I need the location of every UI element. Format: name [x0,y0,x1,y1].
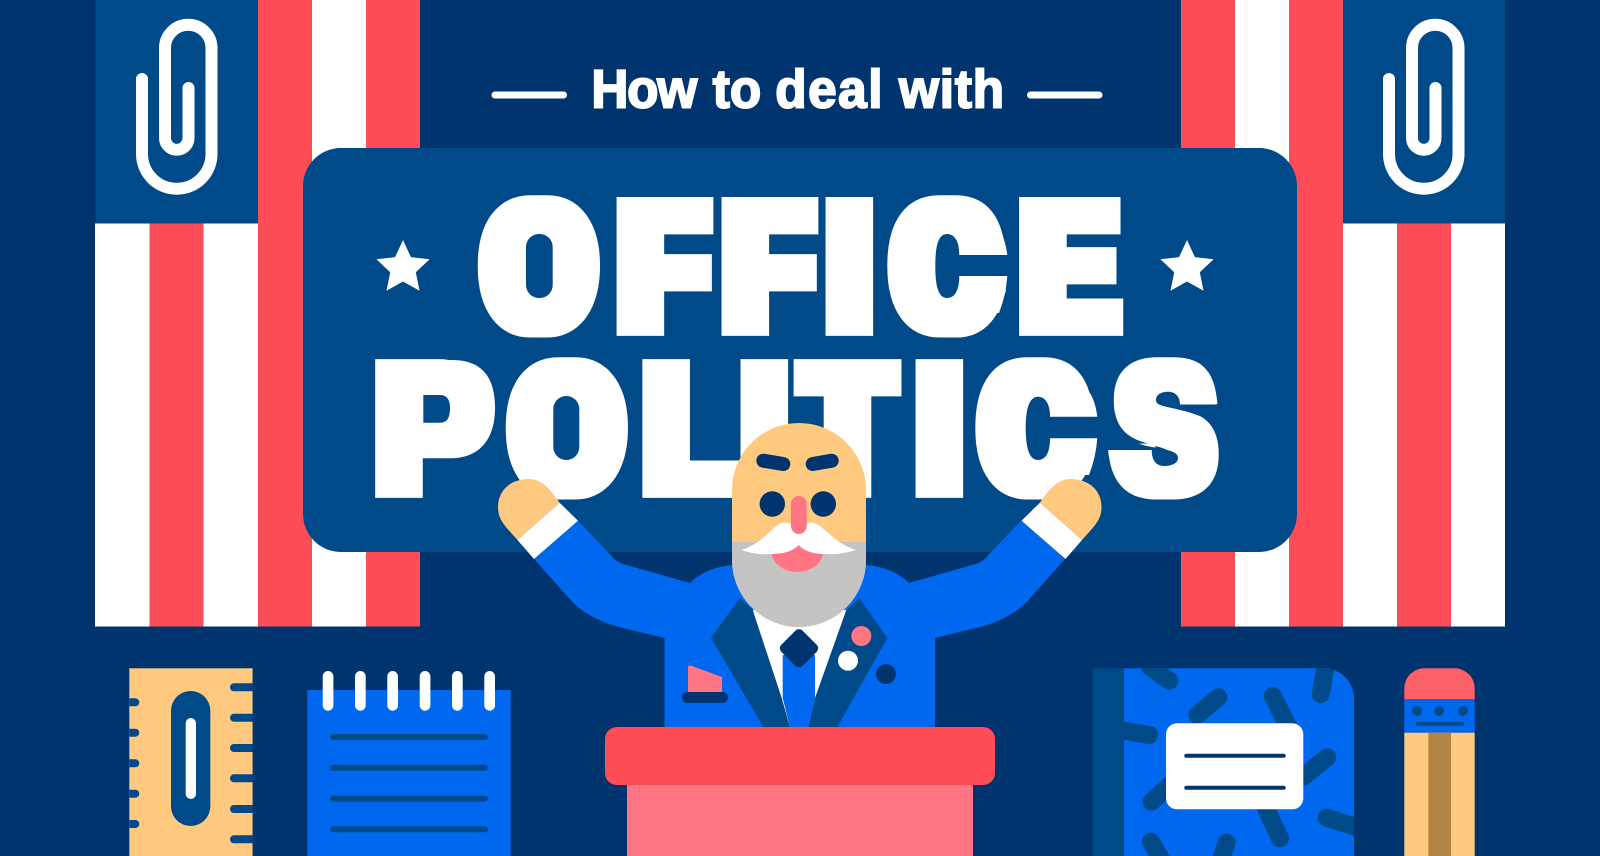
shirt [753,610,846,727]
icon: pencil [1404,668,1475,856]
right flag [1181,0,1505,626]
title: OFFICE: OFFICE [486,169,1114,365]
icon: right star [1160,240,1214,291]
podium [605,727,995,856]
icon: notebook [1093,667,1360,856]
left lapel [711,598,790,727]
character: politician [498,423,1102,727]
tie [783,655,815,727]
left hand and cuff [498,479,578,559]
icon: left star [376,240,430,291]
tie knot [778,627,820,670]
title panel [303,148,1297,552]
icon: notepad [307,671,511,856]
icon: right paperclip [1389,25,1458,189]
eyebrows [763,461,832,464]
icon: left paperclip [142,25,212,189]
title letter shaping [420,225,1232,475]
heading: How to deal with [492,59,1102,120]
moustache [742,523,856,554]
nose [791,496,807,534]
eyes [760,491,836,517]
right lapel [808,598,887,727]
heading: How to deal with: deal [775,59,884,120]
lapel pins [838,626,896,684]
left flag [95,0,420,626]
heading: How to deal with: to [713,59,761,120]
heading: How to deal with: with [898,59,1005,120]
suit [534,521,1065,727]
mouth [772,545,823,572]
title: POLITICS: POLITICS [380,331,1210,527]
beard [732,542,866,627]
heading: How to deal with: How [591,59,698,120]
pocket square [682,665,728,703]
icon: ruler [129,668,263,856]
head [732,423,866,627]
right hand and cuff [1022,479,1102,559]
